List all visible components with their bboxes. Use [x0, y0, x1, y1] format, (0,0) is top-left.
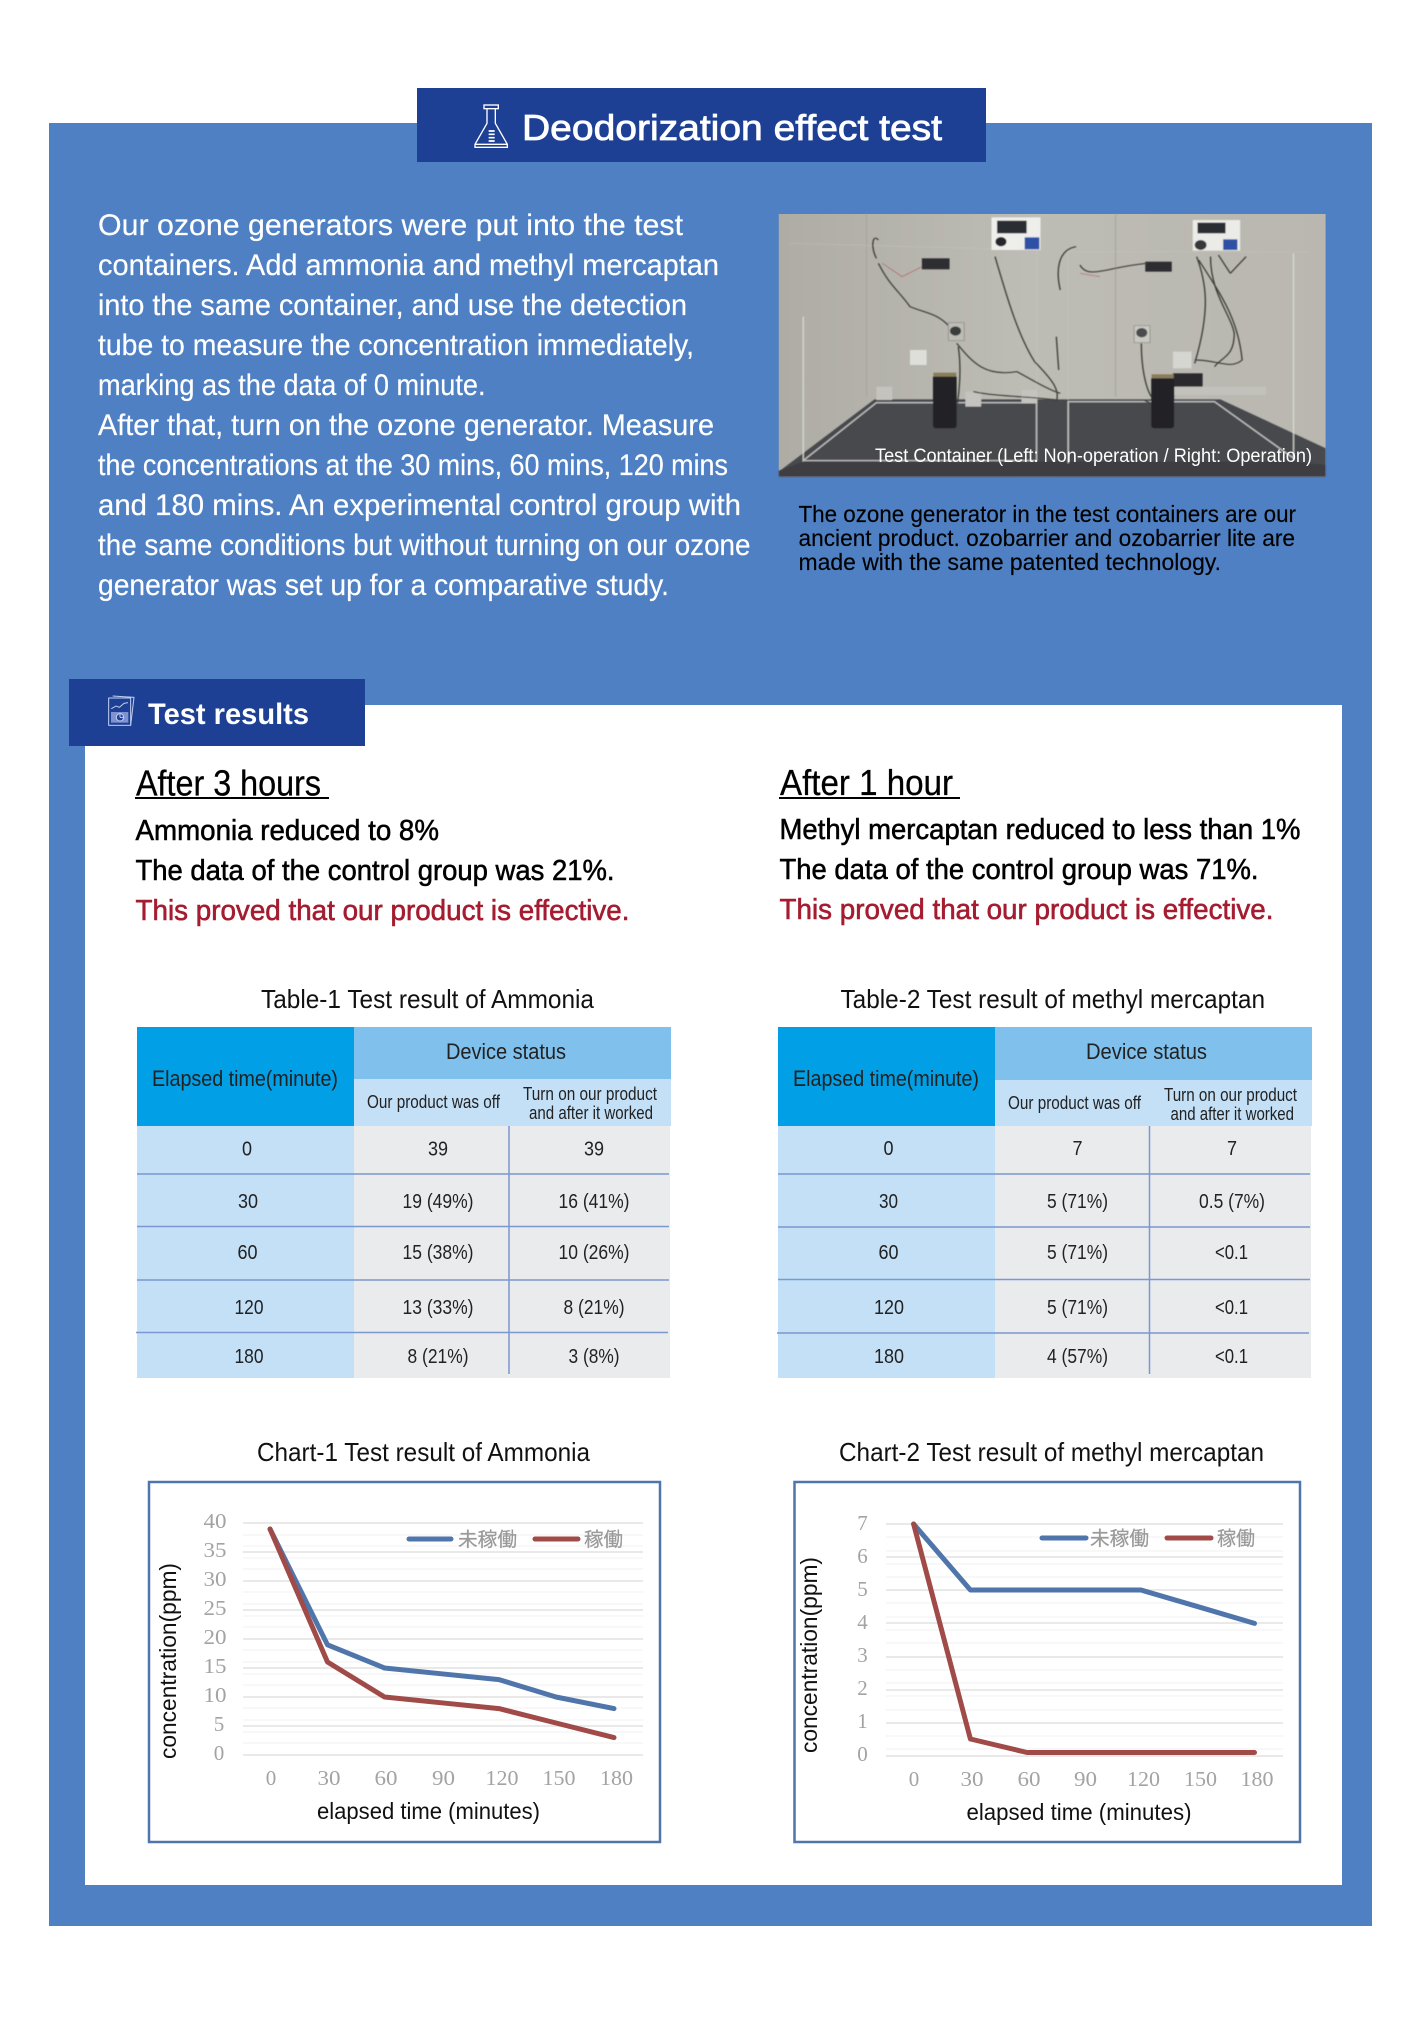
legend: 稼働 [584, 1529, 623, 1551]
title text: Deodorization effect test [522, 107, 942, 148]
table 1: ammonia: Elapsed time(minute) [152, 1066, 338, 1091]
table 1: ammonia [136, 1027, 671, 1378]
x axis labels: 90 [432, 1766, 455, 1790]
table 1: ammonia: 39 [584, 1138, 604, 1160]
x axis labels: 60 [374, 1766, 398, 1790]
chart title: chart 1: Chart-1 Test result of Ammonia [257, 1437, 590, 1467]
chart title: chart 2: Chart-2 Test result of methyl mercaptan [839, 1437, 1264, 1467]
x axis labels: 30 [318, 1766, 340, 1790]
y axis labels: 40 [204, 1509, 226, 1533]
chart 2: methyl mercaptan line chart [794, 1482, 1300, 1842]
y axis labels: 0 [857, 1742, 868, 1766]
legend: 未稼働 [458, 1529, 517, 1551]
text block: test description: the concentrations at the 30 mins, 60 mins, 120 mins [98, 449, 728, 482]
text block: test description: Our ozone generators were put into the test [98, 209, 684, 242]
table 1: ammonia: Device status [446, 1039, 566, 1064]
text block: test description: and 180 mins. An experimental control group with [98, 489, 741, 522]
y axis labels: 5 [857, 1577, 868, 1601]
table 1: ammonia: 120 [234, 1296, 264, 1319]
table 1: ammonia: 13 (33%) [402, 1296, 474, 1319]
y axis labels: 4 [857, 1610, 868, 1634]
y axis labels [204, 1509, 226, 1765]
table 2: methyl mercaptan: <0.1 [1215, 1345, 1248, 1368]
table 1: ammonia: 16 (41%) [558, 1190, 630, 1213]
table 2: methyl mercaptan: and after it worked [1170, 1104, 1294, 1124]
y axis title: concentration(ppm) [796, 1557, 822, 1753]
y axis labels: 1 [857, 1709, 868, 1733]
table 2: methyl mercaptan: 7 [1227, 1137, 1237, 1160]
panel: white results area [85, 705, 1342, 1885]
x axis labels: 180 [1240, 1767, 1274, 1791]
table 2: methyl mercaptan: <0.1 [1215, 1296, 1248, 1319]
text block: test description: marking as the data of 0 minute. [98, 369, 486, 402]
table 2: methyl mercaptan: Elapsed time(minute) [793, 1066, 979, 1091]
table 2: methyl mercaptan: 30 [879, 1190, 898, 1213]
text block: test description: After that, turn on the ozone generator. Measure [98, 409, 714, 442]
result summary: methyl mercaptan [779, 762, 1300, 926]
result summary: ammonia [135, 762, 630, 927]
x axis labels: 150 [1184, 1767, 1217, 1791]
y axis labels: 20 [204, 1625, 226, 1649]
x axis labels: 30 [960, 1767, 984, 1791]
y axis title: concentration(ppm) [155, 1563, 181, 1759]
table title: table 2: Table-2 Test result of methyl mercaptan [840, 984, 1265, 1014]
table 1: ammonia: 0 [242, 1138, 252, 1160]
title banner [417, 88, 986, 162]
x axis title: elapsed time (minutes) [966, 1799, 1192, 1825]
table 2: methyl mercaptan: <0.1 [1215, 1241, 1248, 1264]
result summary: ammonia: The data of the control group was 21%. [136, 855, 614, 887]
text block: test description [98, 209, 750, 602]
y axis labels: 6 [857, 1544, 868, 1568]
photo: test containers [779, 214, 1326, 477]
text block: product note: The ozone generator in the test containers are our [798, 501, 1296, 527]
table 2: methyl mercaptan: 5 (71%) [1047, 1241, 1108, 1264]
table 1: ammonia: 180 [234, 1345, 264, 1368]
y axis labels: 10 [204, 1683, 226, 1707]
table 1: ammonia: Our product was off [367, 1092, 501, 1112]
chart 1: ammonia line chart [149, 1482, 660, 1842]
legend: 稼働 [1217, 1528, 1255, 1550]
y axis labels: 7 [857, 1511, 868, 1535]
text block: test description: tube to measure the concentration immediately, [98, 329, 694, 362]
y axis labels: 5 [214, 1712, 224, 1736]
y axis labels: 15 [204, 1654, 226, 1678]
x axis labels: 120 [1127, 1767, 1160, 1791]
text block: test description: into the same container, and use the detection [98, 289, 687, 322]
table 1: ammonia: 30 [238, 1190, 258, 1213]
result summary: ammonia: Ammonia reduced to 8% [136, 815, 439, 847]
legend [1042, 1528, 1255, 1550]
line: product off [270, 1529, 614, 1709]
icon: report [109, 696, 134, 725]
heading text: Test results [148, 698, 309, 731]
text block: test description: containers. Add ammonia and methyl mercaptan [98, 249, 719, 282]
x axis labels: 150 [542, 1766, 576, 1790]
y axis labels: 2 [857, 1676, 868, 1700]
table 1: ammonia: 15 (38%) [402, 1241, 474, 1264]
y axis labels [857, 1511, 868, 1766]
table 1: ammonia: 8 (21%) [564, 1296, 624, 1319]
table 1: ammonia: 39 [428, 1138, 448, 1160]
line: product off [914, 1524, 1254, 1623]
legend [409, 1529, 623, 1551]
result summary: methyl mercaptan: After 1 hour [780, 762, 953, 803]
heading: test results [69, 679, 365, 746]
x axis labels: 120 [486, 1766, 518, 1790]
icon: flask [475, 105, 507, 147]
table 2: methyl mercaptan: Turn on our product [1164, 1085, 1297, 1105]
table 2: methyl mercaptan: 0.5 (7%) [1199, 1190, 1265, 1213]
photo details: controllers [991, 217, 1041, 250]
table 2: methyl mercaptan: 0 [884, 1137, 894, 1160]
table 2: methyl mercaptan: 120 [874, 1296, 904, 1319]
line: product on [914, 1524, 1254, 1752]
line: product on [270, 1529, 614, 1738]
x axis labels: 0 [266, 1766, 276, 1790]
table 2: methyl mercaptan: 4 (57%) [1047, 1345, 1108, 1368]
result summary: methyl mercaptan: This proved that our product is effective. [780, 894, 1274, 926]
x axis labels [266, 1766, 633, 1790]
x axis labels [909, 1767, 1274, 1791]
text block: test description: generator was set up for a comparative study. [98, 569, 669, 602]
table 2: methyl mercaptan: 7 [1072, 1137, 1082, 1160]
table 2: methyl mercaptan: 5 (71%) [1047, 1296, 1108, 1319]
text block: test description: the same conditions but without turning on our ozone [98, 529, 750, 562]
table 1: ammonia: 8 (21%) [408, 1345, 468, 1368]
table 2: methyl mercaptan: 5 (71%) [1047, 1190, 1108, 1213]
y axis labels: 0 [214, 1741, 224, 1765]
result summary: methyl mercaptan: The data of the control group was 71%. [780, 854, 1258, 886]
text block: product note: made with the same patented technology. [798, 549, 1221, 575]
table 2: methyl mercaptan: 180 [874, 1345, 904, 1368]
y axis labels: 3 [857, 1643, 868, 1667]
table 1: ammonia: 10 (26%) [558, 1241, 630, 1264]
text block: product note [798, 501, 1296, 575]
x axis labels: 180 [600, 1766, 633, 1790]
photo details: wires [873, 238, 1246, 403]
photo details: acrylic boxes [789, 243, 1309, 463]
photo details: ozone generators [933, 375, 957, 428]
table 1: ammonia: Turn on our product [523, 1084, 657, 1104]
y axis labels: 35 [204, 1538, 226, 1562]
x axis labels: 0 [909, 1767, 919, 1791]
table 1: ammonia: 3 (8%) [568, 1345, 620, 1368]
table 2: methyl mercaptan: Device status [1086, 1039, 1207, 1064]
photo details: sensors [948, 323, 964, 341]
photo caption: Test Container (Left: Non-operation / Right: Operation) [875, 446, 1312, 467]
x axis labels: 90 [1074, 1767, 1097, 1791]
x axis labels: 60 [1018, 1767, 1040, 1791]
x axis title: elapsed time (minutes) [317, 1798, 540, 1824]
result summary: ammonia: This proved that our product is effective. [136, 895, 630, 927]
table 1: ammonia: 19 (49%) [402, 1190, 474, 1213]
table 1: ammonia: 60 [238, 1241, 258, 1264]
table 2: methyl mercaptan: Our product was off [1008, 1093, 1142, 1113]
y axis labels: 25 [204, 1596, 226, 1620]
table 1: ammonia: and after it worked [529, 1103, 653, 1123]
table 2: methyl mercaptan [777, 1027, 1312, 1378]
table 2: methyl mercaptan: 60 [878, 1241, 898, 1264]
result summary: methyl mercaptan: Methyl mercaptan reduced to less than 1% [780, 814, 1300, 846]
result summary: ammonia: After 3 hours [136, 762, 321, 804]
table title: table 1: Table-1 Test result of Ammonia [261, 984, 595, 1014]
legend: 未稼働 [1090, 1528, 1149, 1550]
y axis labels: 30 [204, 1567, 226, 1591]
text block: product note: ancient product. ozobarrier and ozobarrier lite are [798, 525, 1295, 551]
